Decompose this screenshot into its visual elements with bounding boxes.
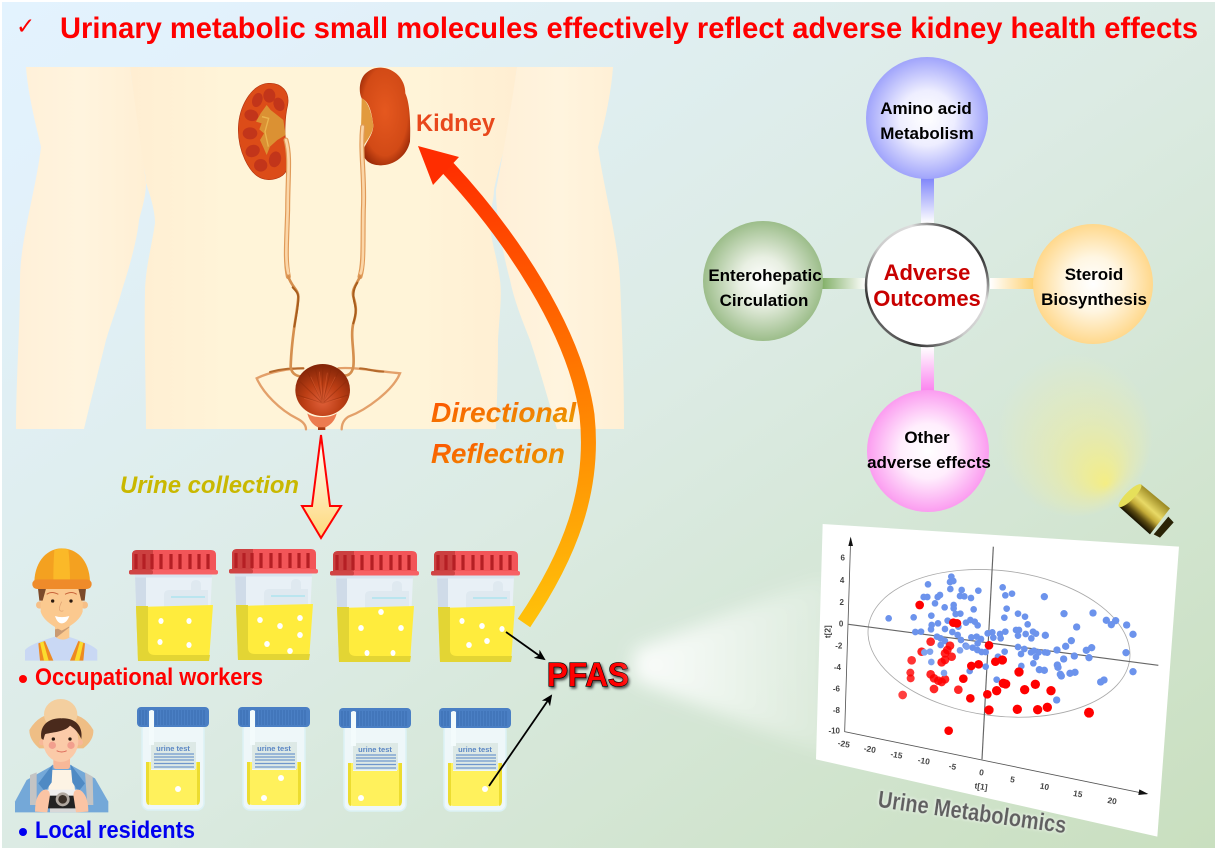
ureters and ducts [257, 127, 400, 429]
y axis tick labels: -10 [828, 726, 841, 735]
node: other adverse effects: adverse effects [867, 453, 991, 472]
cup 2 [229, 549, 318, 660]
label: PFAS: PFAS [547, 656, 629, 693]
urethra stub [318, 427, 325, 430]
prostate [307, 413, 337, 428]
icon: local resident [15, 699, 108, 812]
node: enterohepatic circulation: Enterohepatic [708, 266, 822, 285]
label: Directional Reflection: Reflection [431, 438, 565, 469]
cup 4 [431, 551, 520, 662]
jar 4: urine test [458, 745, 492, 754]
x axis tick labels: 10 [1039, 781, 1050, 792]
urinary system anatomy [238, 68, 410, 430]
particles in cups [157, 609, 505, 656]
overlapping blue points [921, 643, 970, 676]
x axis tick labels: -15 [890, 749, 904, 761]
x axis tick labels [837, 738, 1118, 807]
connector: bottom [921, 347, 934, 392]
node: amino acid metabolism: Amino acid [880, 99, 972, 118]
node: enterohepatic circulation: Circulation [720, 291, 808, 310]
right kidney hilum [361, 98, 373, 145]
chart: urine metabolomics score plot [816, 524, 1179, 837]
urine jars: local residents [137, 707, 511, 811]
label: Kidney: Kidney [416, 110, 496, 137]
arrow: urine collection [302, 435, 341, 538]
axis arrows [848, 537, 1148, 795]
axes [845, 538, 1158, 794]
label: Directional Reflection [431, 397, 577, 469]
y axis tick labels: 4 [840, 576, 845, 585]
axis titles: t[1] [974, 781, 988, 792]
x axis tick labels: 20 [1107, 795, 1118, 807]
node: adverse outcomes: Adverse [884, 260, 970, 285]
jar 3: urine test [358, 745, 392, 754]
check mark: ✓ [16, 14, 35, 40]
right kidney [360, 68, 410, 165]
x axis tick labels: -10 [917, 755, 931, 767]
node: adverse outcomes: Outcomes [873, 286, 981, 311]
paper [816, 524, 1179, 837]
connector: top [921, 178, 934, 223]
y axis tick labels: 6 [841, 554, 846, 563]
y axis tick labels [828, 554, 846, 735]
arrow: workers to PFAS [506, 632, 544, 659]
y axis tick labels: 0 [839, 620, 844, 629]
label: Urine Metabolomics: Urine Metabolomics [876, 786, 1068, 839]
connector: left [821, 278, 866, 289]
x axis tick labels: -20 [863, 743, 877, 755]
node: amino acid metabolism: Metabolism [880, 124, 974, 143]
x axis tick labels: 15 [1072, 788, 1084, 800]
node: steroid biosynthesis: Biosynthesis [1041, 290, 1147, 309]
label: Local residents: Local residents [35, 817, 195, 844]
label: Occupational workers: Occupational workers [35, 664, 263, 691]
y axis tick labels: -2 [835, 642, 843, 651]
jar 4 [439, 708, 511, 811]
confidence ellipse [859, 555, 1139, 732]
jar 2 [238, 707, 310, 810]
icon: occupational worker [25, 548, 97, 661]
blue sample points [885, 573, 1137, 704]
urine cups: occupational workers [129, 549, 520, 662]
particles in jars [175, 775, 488, 801]
axis titles [823, 625, 988, 792]
node: amino acid metabolism [866, 57, 988, 179]
y axis tick labels: 2 [840, 598, 845, 607]
axis titles: t[2] [823, 625, 833, 638]
panel: adverse outcomes diagram [703, 57, 1153, 512]
x axis tick labels: -5 [948, 761, 957, 772]
node: other adverse effects [867, 390, 991, 512]
jar 1: urine test [156, 744, 190, 753]
y axis tick labels: -8 [833, 706, 841, 715]
node: steroid biosynthesis [1033, 224, 1153, 344]
y axis tick labels: -4 [834, 663, 842, 672]
red sample points [898, 601, 1094, 735]
node: steroid biosynthesis: Steroid [1065, 265, 1123, 284]
left kidney cross-section [238, 83, 288, 180]
icon: spotlight lamp [1116, 482, 1174, 538]
panel: human body with urinary system [16, 67, 624, 430]
arrow: directional reflection [418, 146, 588, 623]
cup 1 [129, 550, 218, 661]
lamp glow [997, 353, 1153, 517]
arrow: residents to PFAS [489, 696, 551, 786]
jar 1 [137, 707, 209, 810]
label: Directional Reflection: Directional [431, 397, 577, 428]
jar 2: urine test [257, 744, 291, 753]
title [16, 12, 1198, 45]
y axis tick labels: -6 [833, 684, 841, 693]
body silhouette [16, 67, 624, 429]
connector: right [990, 278, 1034, 289]
x axis tick labels: 5 [1009, 774, 1016, 785]
x axis tick labels: 0 [978, 767, 985, 778]
jar 3 [339, 708, 411, 811]
node: adverse outcomes [866, 224, 988, 346]
label: Urine collection: Urine collection [120, 472, 299, 499]
cup 3 [330, 551, 419, 662]
light beam [634, 575, 830, 755]
node: other adverse effects: Other [904, 428, 950, 447]
title text: Urinary metabolic small molecules effectively reflect adverse kidney health effects [60, 12, 1198, 45]
bladder [295, 364, 350, 416]
node: enterohepatic circulation [703, 221, 823, 341]
x axis tick labels: -25 [837, 738, 851, 750]
